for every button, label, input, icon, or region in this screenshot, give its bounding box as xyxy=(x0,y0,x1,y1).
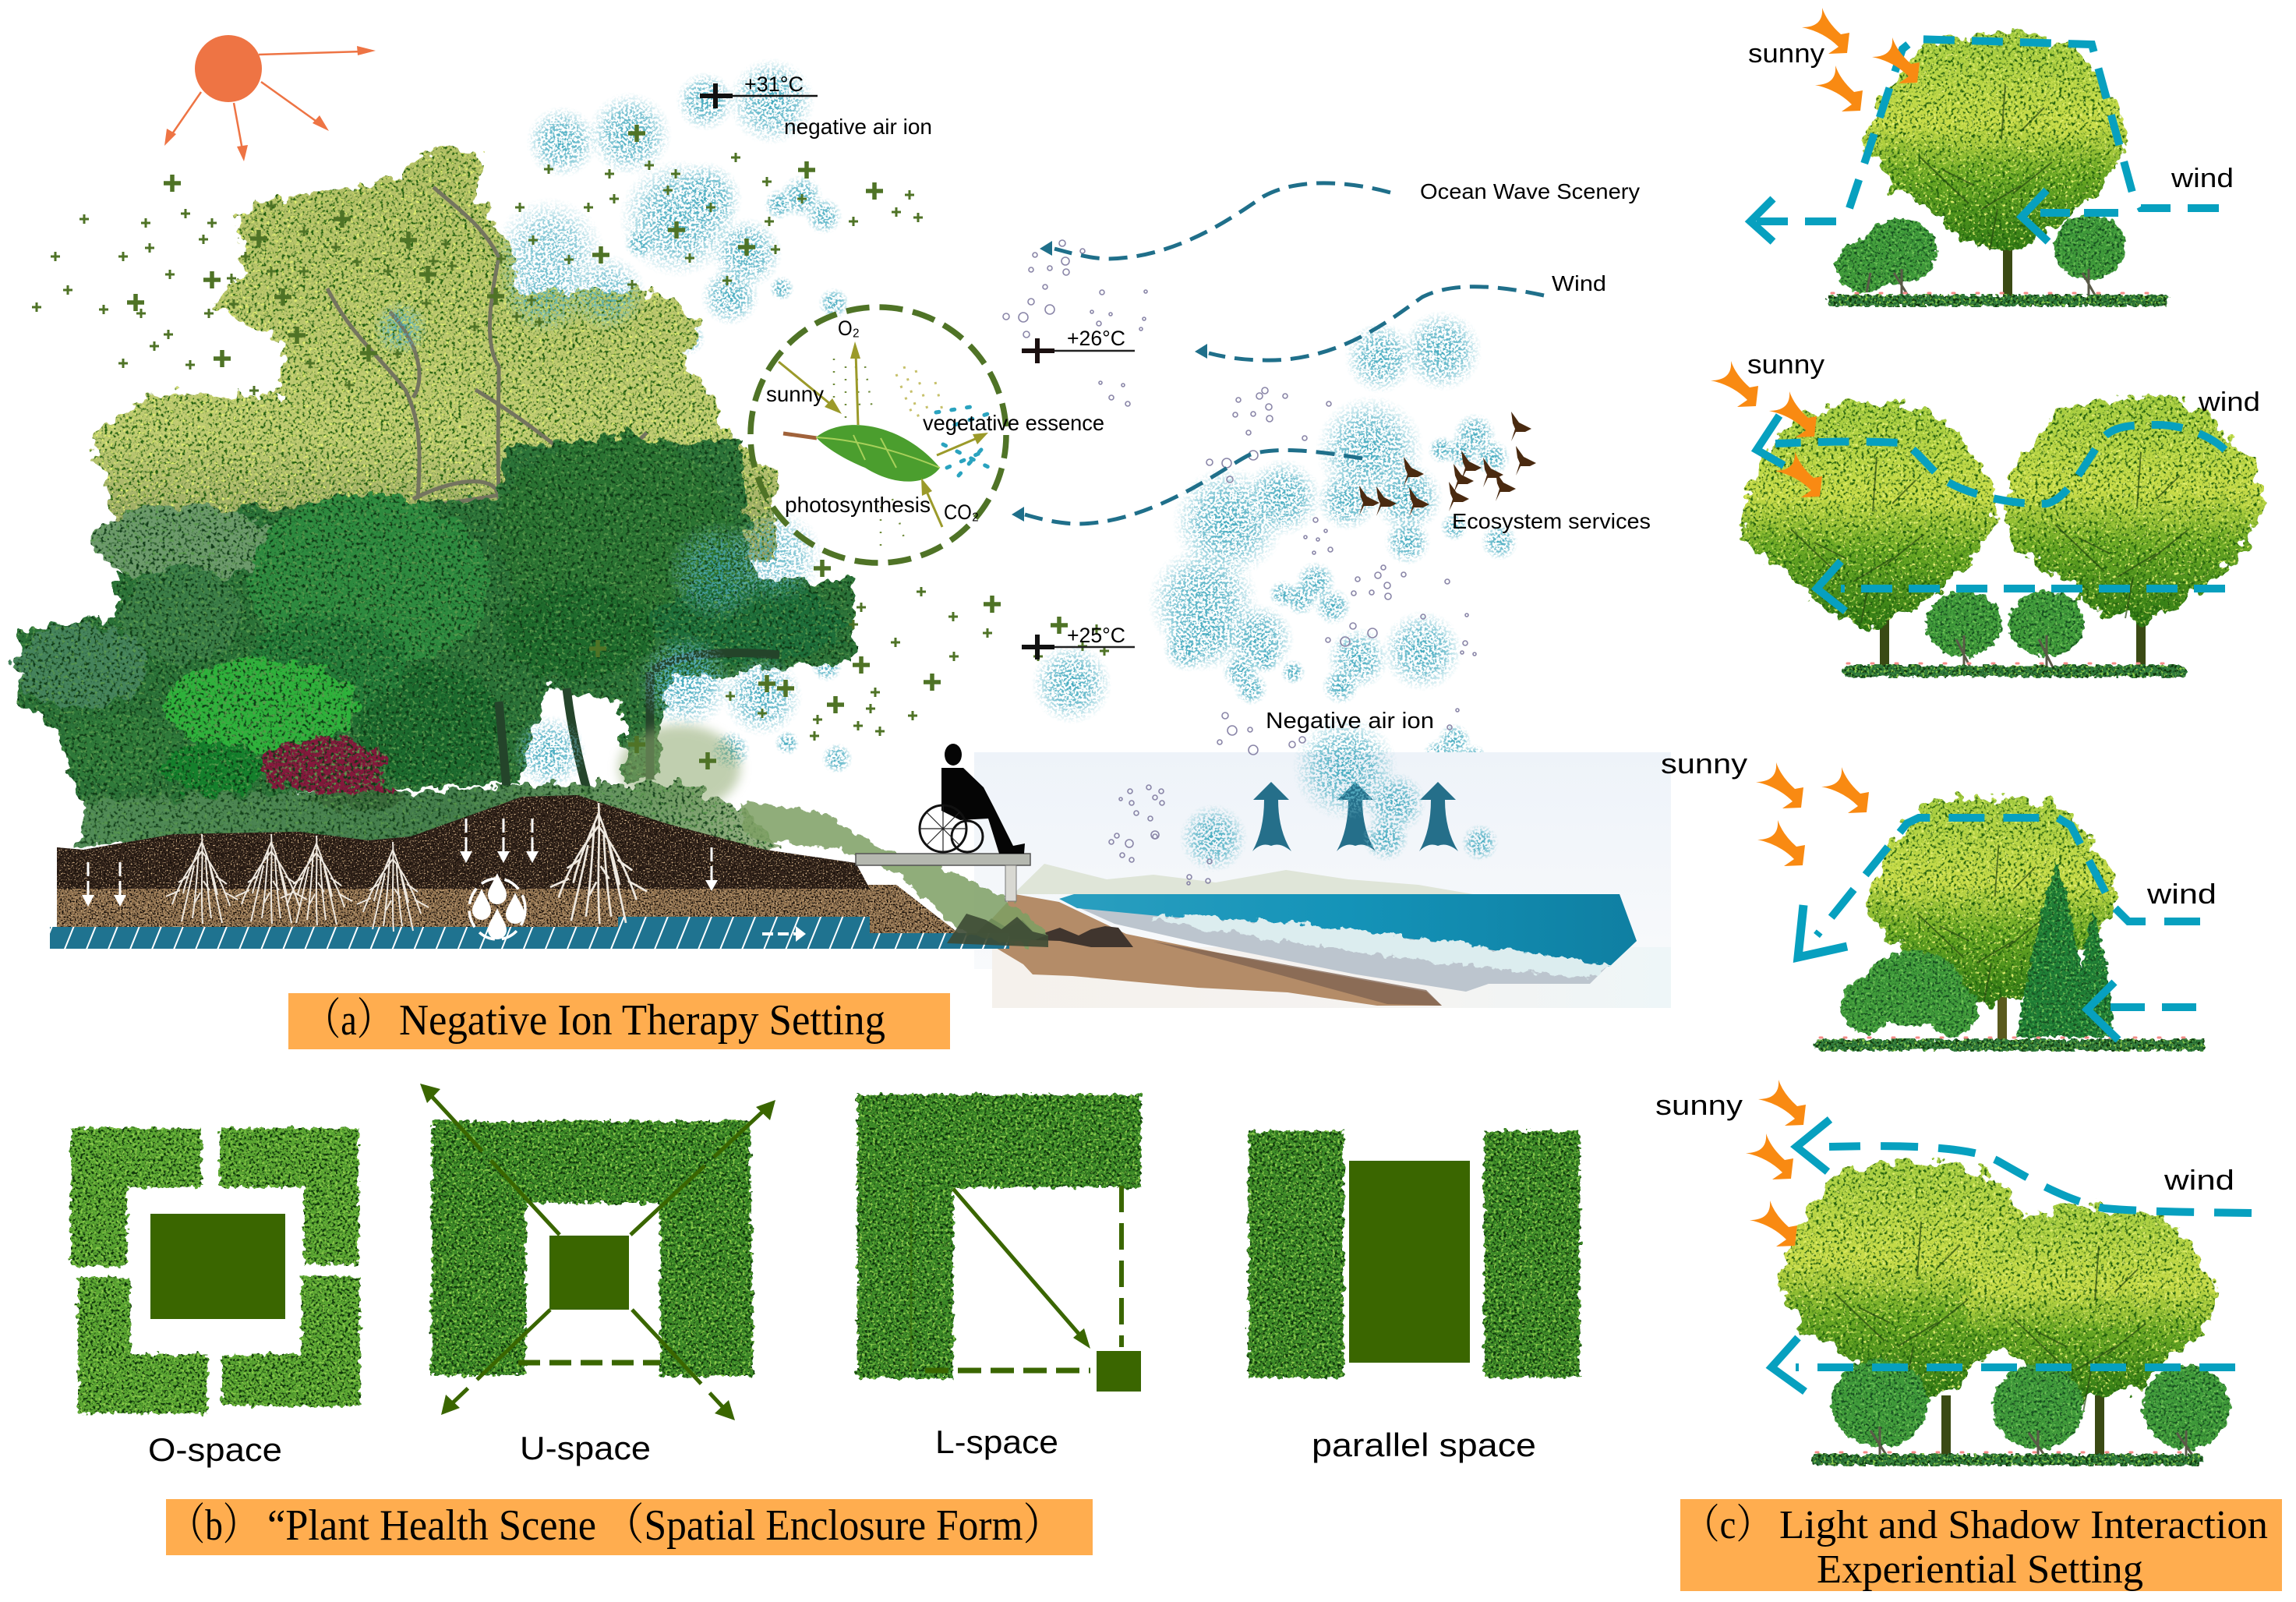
tree limbs xyxy=(1920,84,2052,250)
shrub stems xyxy=(1956,635,2054,670)
small green plus signs xyxy=(32,153,1109,741)
label: wind: wind xyxy=(2198,387,2260,417)
ground grass xyxy=(1827,293,2169,306)
heading (c): Light and Shadow Interaction xyxy=(1779,1503,2268,1547)
dark topsoil hill xyxy=(57,795,870,889)
water flow arrow xyxy=(762,926,806,942)
label: L-space: L-space xyxy=(935,1423,1058,1460)
label: CO2: CO₂ xyxy=(944,500,979,524)
label: wind: wind xyxy=(2146,878,2217,910)
particle dots xyxy=(834,359,990,546)
shrub stems xyxy=(1867,269,2096,298)
label: wind: Wind xyxy=(1552,271,1606,295)
label: ocean wave scenery: Ocean Wave Scenery xyxy=(1420,179,1640,203)
soil section xyxy=(50,795,1009,949)
central space xyxy=(150,1214,285,1319)
olive flow arrows xyxy=(779,341,988,527)
panel: negative ion therapy setting xyxy=(16,35,1671,1049)
hedges xyxy=(71,1128,360,1413)
tree trunk xyxy=(1998,990,2007,1051)
distant mountains xyxy=(1013,864,1473,894)
U-space plan xyxy=(420,1084,775,1420)
lower shore cream xyxy=(992,947,1671,1008)
sandy soil layer xyxy=(57,885,959,933)
corner space xyxy=(1097,1351,1141,1392)
wind path over canopy xyxy=(1750,39,2219,221)
red maple xyxy=(261,737,404,811)
label: sunny: sunny xyxy=(766,382,824,406)
sun arrows xyxy=(1746,1080,1806,1247)
heading (b) xyxy=(166,1499,1093,1555)
shrubs xyxy=(1927,591,2084,656)
label: negative air ion lower: Negative air ion xyxy=(1266,709,1434,734)
label: wind: wind xyxy=(2164,1164,2234,1196)
panel: plant health scene spatial enclosure xyxy=(71,1084,1580,1555)
grass slope xyxy=(740,803,1048,947)
L-space plan xyxy=(857,1095,1141,1392)
groundwater xyxy=(50,917,1009,949)
pale canopy tree xyxy=(90,144,775,561)
label: sunny: sunny xyxy=(1748,39,1824,69)
plant roots xyxy=(166,803,647,932)
label: vegetative essence: vegetative essence xyxy=(923,411,1104,435)
dark green middle tree xyxy=(249,494,500,784)
gray-green upper left tree xyxy=(91,504,275,579)
soft gray-green foliage xyxy=(619,725,740,811)
main tree group xyxy=(16,144,853,850)
forest mass xyxy=(19,440,853,803)
understory tree cyan mist xyxy=(512,633,803,790)
central space xyxy=(549,1236,629,1310)
label: ecosystem services: Ecosystem services xyxy=(1452,509,1651,533)
left dark trees xyxy=(16,569,242,786)
shrubs xyxy=(1832,1360,2230,1449)
photosynthesis diagram xyxy=(751,307,1104,563)
ground grass xyxy=(1843,663,2186,677)
label: sunny: sunny xyxy=(1661,748,1747,780)
heading (b): （b） xyxy=(170,1501,258,1550)
scene 1: single tree xyxy=(1748,8,2234,306)
dark wet sand xyxy=(1153,942,1442,1006)
wind path over canopy xyxy=(1829,1146,2252,1213)
heading (b): （Spatial Enclosure Form） xyxy=(604,1501,1063,1550)
tree canopy xyxy=(1866,33,2128,250)
tree limbs xyxy=(1791,452,2188,623)
canopy ion mist overlay xyxy=(373,197,824,623)
tree canopy xyxy=(1866,796,2116,1003)
heading (c): （c） xyxy=(1683,1503,1772,1547)
scene 2: paired trees xyxy=(1711,350,2264,677)
viewing platform xyxy=(856,854,1030,901)
heading (b): “Plant Health Scene xyxy=(267,1501,596,1550)
tree trunks xyxy=(499,653,779,795)
bright green small tree xyxy=(161,659,359,794)
label: negative air ion: negative air ion xyxy=(784,115,932,139)
air bubbles xyxy=(1003,240,1476,885)
wet shore base xyxy=(1059,899,1609,992)
dashed outward arrows xyxy=(427,1091,768,1413)
dashed circle xyxy=(751,307,1006,563)
conifers xyxy=(2018,861,2113,1037)
shore rocks xyxy=(947,914,1048,947)
beach ion clouds xyxy=(1179,715,1499,872)
large green plus signs xyxy=(127,125,1068,769)
tree trunks xyxy=(1880,616,2146,672)
beach sand xyxy=(974,894,1442,1006)
tree limbs xyxy=(1917,845,2043,1003)
heading (c) xyxy=(1680,1499,2282,1592)
scene 3: tree with conifers xyxy=(1661,748,2217,1051)
icon: flock of birds xyxy=(1359,412,1536,517)
leaf xyxy=(783,425,940,482)
panel: light and shadow interaction xyxy=(1655,8,2282,1592)
temperature marker +26°C: +26°C xyxy=(1067,327,1125,350)
label: wind: wind xyxy=(2171,164,2234,193)
shrubs xyxy=(1836,214,2125,293)
label: photosynthesis: photosynthesis xyxy=(785,493,931,517)
wind path over canopy xyxy=(1817,818,2200,935)
label: parallel space: parallel space xyxy=(1312,1427,1536,1463)
pale tree branches xyxy=(327,187,647,515)
icon: person in wheelchair xyxy=(920,744,1025,854)
dashed edges xyxy=(1119,1186,1124,1347)
sun arrows xyxy=(1756,762,1869,866)
temperature marker +25°C: +25°C xyxy=(1067,624,1125,647)
label: sunny: sunny xyxy=(1655,1089,1743,1121)
sea xyxy=(1059,894,1637,967)
ocean air arrows on beach xyxy=(1252,782,1458,851)
ground grass xyxy=(1814,1038,2206,1051)
understory shrubs xyxy=(78,783,779,850)
scene 4: tree canopy row xyxy=(1655,1080,2252,1466)
heading (a): Negative Ion Therapy Setting xyxy=(399,996,885,1045)
hedges xyxy=(431,1121,754,1376)
temperature marker +31°C: +31°C xyxy=(744,72,804,96)
sun arrows xyxy=(1802,8,1920,111)
wind path over canopy xyxy=(1775,425,2225,504)
label: O2: O₂ xyxy=(838,317,860,340)
water droplets icon xyxy=(469,873,525,939)
sun with rays xyxy=(164,35,376,161)
parallel space plan xyxy=(1249,1131,1580,1377)
central space xyxy=(1349,1161,1470,1363)
arrow: ocean wave scenery flow xyxy=(1040,183,1390,259)
sun arrows xyxy=(1711,361,1822,497)
heading (c): Experiential Setting xyxy=(1817,1547,2143,1592)
tree canopies xyxy=(1779,1160,2218,1399)
arrow: ecosystem services flow xyxy=(1012,450,1362,524)
breaking waves xyxy=(1153,914,1609,978)
heading (a) xyxy=(288,993,950,1049)
ground grass xyxy=(1812,1452,2202,1466)
beach scene photo xyxy=(974,752,1671,1008)
tree trunks xyxy=(1941,1395,2104,1466)
heading (a): （a） xyxy=(305,996,393,1045)
shrub stems xyxy=(1870,1427,2195,1459)
hedges xyxy=(1249,1131,1580,1377)
hedges xyxy=(857,1095,1141,1378)
label: U-space: U-space xyxy=(520,1430,651,1466)
beach rocks xyxy=(974,918,1133,947)
diagonal arrow xyxy=(953,1189,1085,1341)
label: sunny: sunny xyxy=(1747,350,1824,380)
tree trunk xyxy=(2003,242,2012,298)
O-space plan xyxy=(71,1128,360,1413)
arrow: wind flow xyxy=(1195,287,1544,360)
infiltration arrows xyxy=(82,819,718,907)
negative ion clouds xyxy=(526,58,1518,778)
tree canopies xyxy=(1740,398,2264,626)
shrubs xyxy=(1842,951,1977,1036)
dark green right tree xyxy=(497,435,846,678)
tree limbs xyxy=(1835,1222,2146,1412)
label: O-space: O-space xyxy=(148,1431,282,1468)
